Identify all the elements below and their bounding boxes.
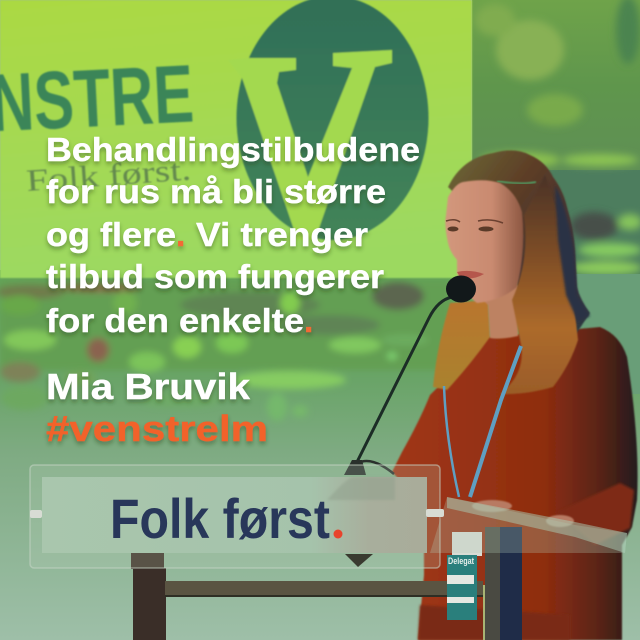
sleeve bbox=[557, 483, 634, 545]
podium bolts bbox=[30, 509, 444, 518]
speaker bbox=[392, 150, 638, 640]
mouth bbox=[457, 271, 484, 278]
background: lower stage wall bbox=[0, 270, 640, 640]
quote text: tilbud som fungerer bbox=[46, 259, 384, 296]
lanyard bbox=[444, 346, 521, 497]
quote text: . bbox=[304, 303, 313, 340]
quote text bbox=[46, 132, 420, 340]
badge: Delegat bbox=[448, 556, 474, 566]
hair left strand bbox=[433, 300, 490, 390]
eyes bbox=[446, 220, 503, 232]
hair front bbox=[500, 175, 578, 394]
frosted panel bbox=[42, 477, 427, 553]
glass front edge bbox=[447, 497, 627, 553]
quote text: . bbox=[176, 217, 185, 254]
badge bbox=[447, 532, 482, 620]
projected slogan: Folk først: Folk først. bbox=[25, 152, 192, 198]
quote text: Behandlingstilbudene bbox=[46, 132, 420, 169]
podium text: Folk først: Folk først bbox=[110, 487, 330, 550]
foliage band behind quote bbox=[0, 280, 450, 421]
dress hem band bbox=[418, 605, 570, 640]
quote text: for rus må bli større bbox=[46, 174, 386, 211]
dress bbox=[392, 327, 638, 640]
hair top highlights bbox=[497, 181, 536, 183]
hashtag: #venstrelm bbox=[46, 408, 268, 449]
podium legs bbox=[131, 527, 522, 640]
face bbox=[445, 180, 523, 303]
podium red dot bbox=[334, 530, 342, 538]
projection screen: green panel bbox=[0, 0, 472, 278]
mic base reflection bbox=[327, 477, 395, 500]
background: right foliage screen bbox=[472, 0, 640, 289]
hair back top bbox=[448, 150, 590, 340]
speaker name: Mia Bruvik bbox=[46, 366, 251, 407]
quote text: Vi trenger bbox=[196, 217, 368, 254]
podium glass plate bbox=[30, 465, 440, 568]
hands bbox=[472, 500, 574, 527]
hair dark right bbox=[555, 185, 590, 322]
quote text: og flere bbox=[46, 217, 176, 254]
projected logo: V circle bbox=[228, 0, 428, 240]
microphone bbox=[344, 276, 476, 475]
neck bbox=[478, 285, 518, 339]
background: right wall lower bbox=[572, 274, 640, 394]
mic base tip bbox=[345, 554, 373, 567]
quote text: for den enkelte bbox=[46, 303, 304, 340]
glass sloped top bbox=[430, 497, 627, 553]
